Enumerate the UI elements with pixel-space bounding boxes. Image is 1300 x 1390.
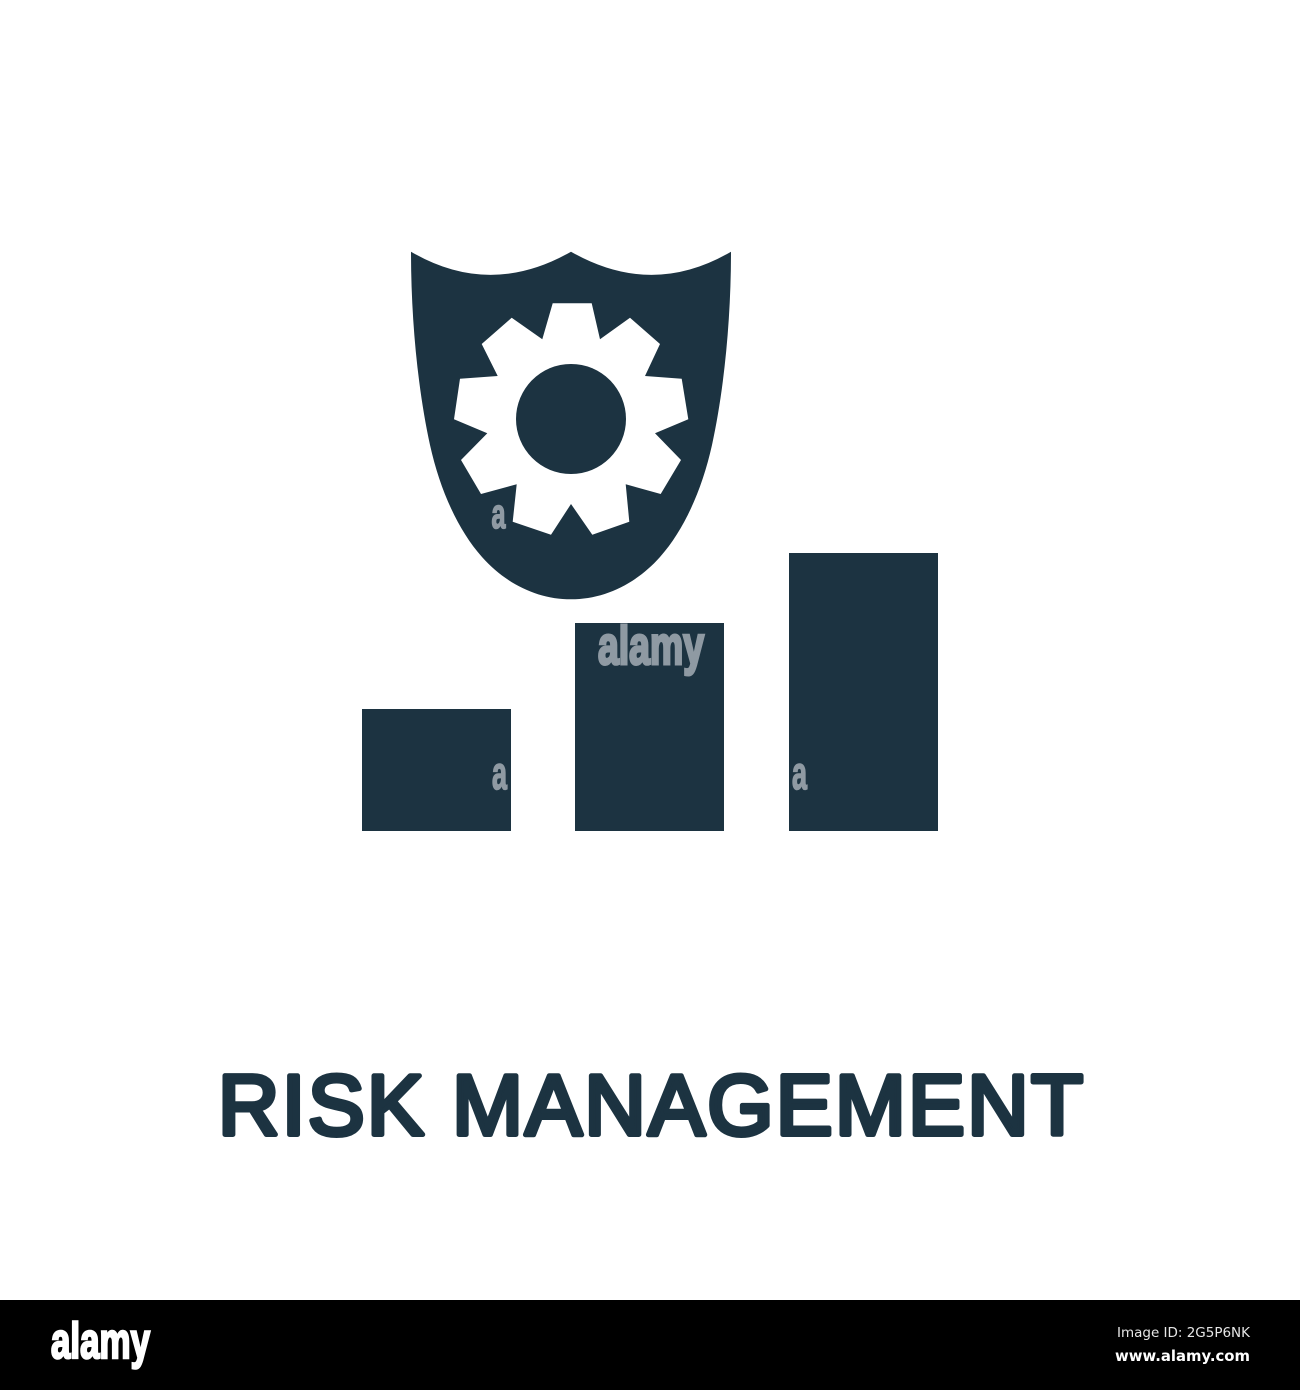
title: RISK MANAGEMENT bbox=[218, 1059, 1083, 1154]
footer url: www.alamy.com bbox=[1115, 1347, 1250, 1365]
bar chart: three rising bars bbox=[362, 553, 938, 831]
icon: shield bbox=[411, 252, 731, 599]
footer image id: Image ID: 2G5P6NK bbox=[1117, 1325, 1251, 1341]
icon: gear bbox=[454, 303, 688, 535]
footer logo: alamy bbox=[51, 1313, 150, 1369]
watermark marks on the icon bbox=[492, 490, 807, 799]
watermark marks on the icon: a bbox=[492, 747, 507, 799]
icon: risk management shield, gear and bars bbox=[362, 252, 938, 831]
watermark marks on the icon: a bbox=[492, 490, 506, 537]
icon: gear hub bbox=[516, 364, 626, 474]
watermark marks on the icon: a bbox=[792, 747, 807, 799]
watermark marks on the icon: alamy bbox=[598, 616, 704, 676]
footer bar bbox=[0, 1300, 1300, 1390]
